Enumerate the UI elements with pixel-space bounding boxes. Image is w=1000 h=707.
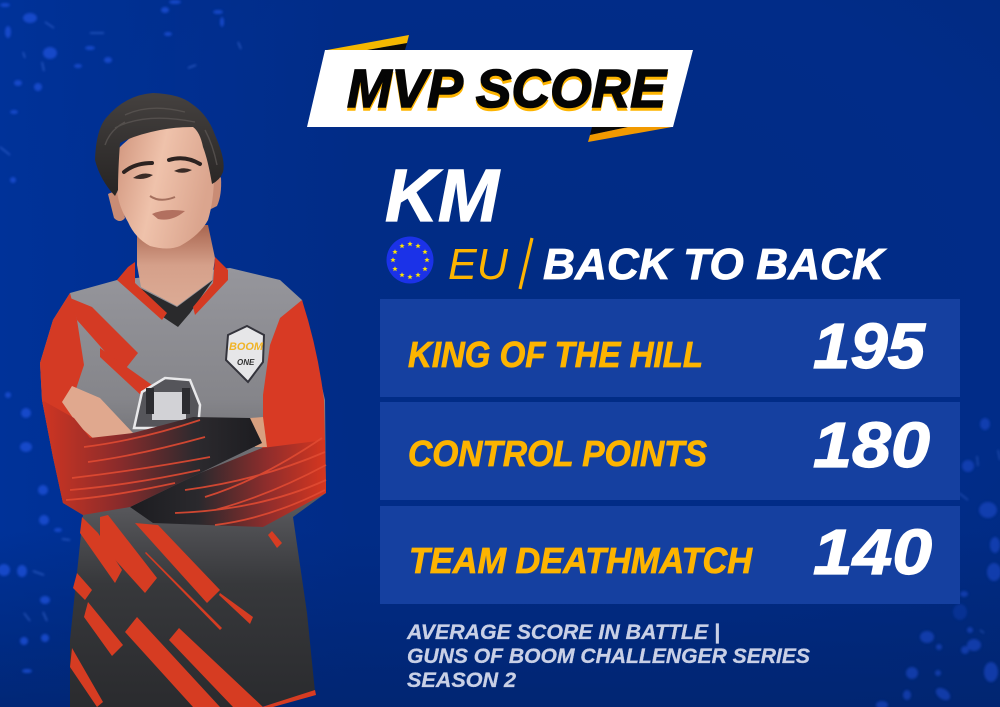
panel: team deathmatch <box>380 506 960 604</box>
jersey collar <box>117 257 228 327</box>
banner accent bottom <box>588 127 672 142</box>
background particles: lower left <box>0 392 70 673</box>
background particles: top left <box>0 0 241 183</box>
jersey mascot <box>134 378 200 428</box>
upper crossed forearm <box>42 400 262 515</box>
tournament badge: ONE <box>237 358 255 367</box>
ears <box>108 176 221 221</box>
jersey right sleeve <box>262 300 326 493</box>
label: KING OF THE HILL <box>408 334 703 375</box>
footnote: GUNS OF BOOM CHALLENGER SERIES <box>407 645 810 668</box>
label: CONTROL POINTS <box>408 433 707 474</box>
sleeve stripes <box>66 420 326 525</box>
panel: king of the hill <box>380 299 960 397</box>
footnote: SEASON 2 <box>407 669 516 692</box>
neck <box>137 225 215 306</box>
eyes <box>133 168 192 179</box>
jersey torso <box>40 268 326 707</box>
title text: MVP SCORE <box>347 59 668 119</box>
title banner <box>307 35 693 142</box>
face <box>117 119 214 248</box>
eyebrows <box>124 158 200 172</box>
lower crossed forearm <box>130 440 326 527</box>
panel: control points <box>380 402 960 500</box>
hair <box>95 93 224 196</box>
background particles: lower right <box>876 418 1000 707</box>
title shadow: MVP SCORE <box>347 62 668 122</box>
player name: KM <box>385 154 500 237</box>
divider <box>520 238 532 289</box>
score: 140 <box>813 516 932 588</box>
region label: EU <box>448 240 508 289</box>
hand on arm <box>62 386 133 440</box>
banner accent top <box>327 35 409 50</box>
label: TEAM DEATHMATCH <box>409 540 753 581</box>
hair highlights <box>105 108 217 165</box>
icon: EU flag <box>386 236 434 284</box>
nose and mouth <box>150 196 185 220</box>
jersey left sleeve <box>40 293 100 503</box>
score: 180 <box>813 409 930 481</box>
jersey lower red stripes <box>70 515 316 707</box>
score: 195 <box>813 310 926 382</box>
team name: BACK TO BACK <box>543 240 887 289</box>
footnote <box>406 621 810 692</box>
tournament badge: BOOM <box>229 341 264 353</box>
right hand <box>250 417 267 447</box>
jersey chest panels <box>70 298 152 397</box>
tournament badge <box>226 326 264 382</box>
footnote: AVERAGE SCORE IN BATTLE | <box>406 621 720 644</box>
player photo illustration <box>40 93 326 707</box>
banner plate <box>307 50 693 127</box>
